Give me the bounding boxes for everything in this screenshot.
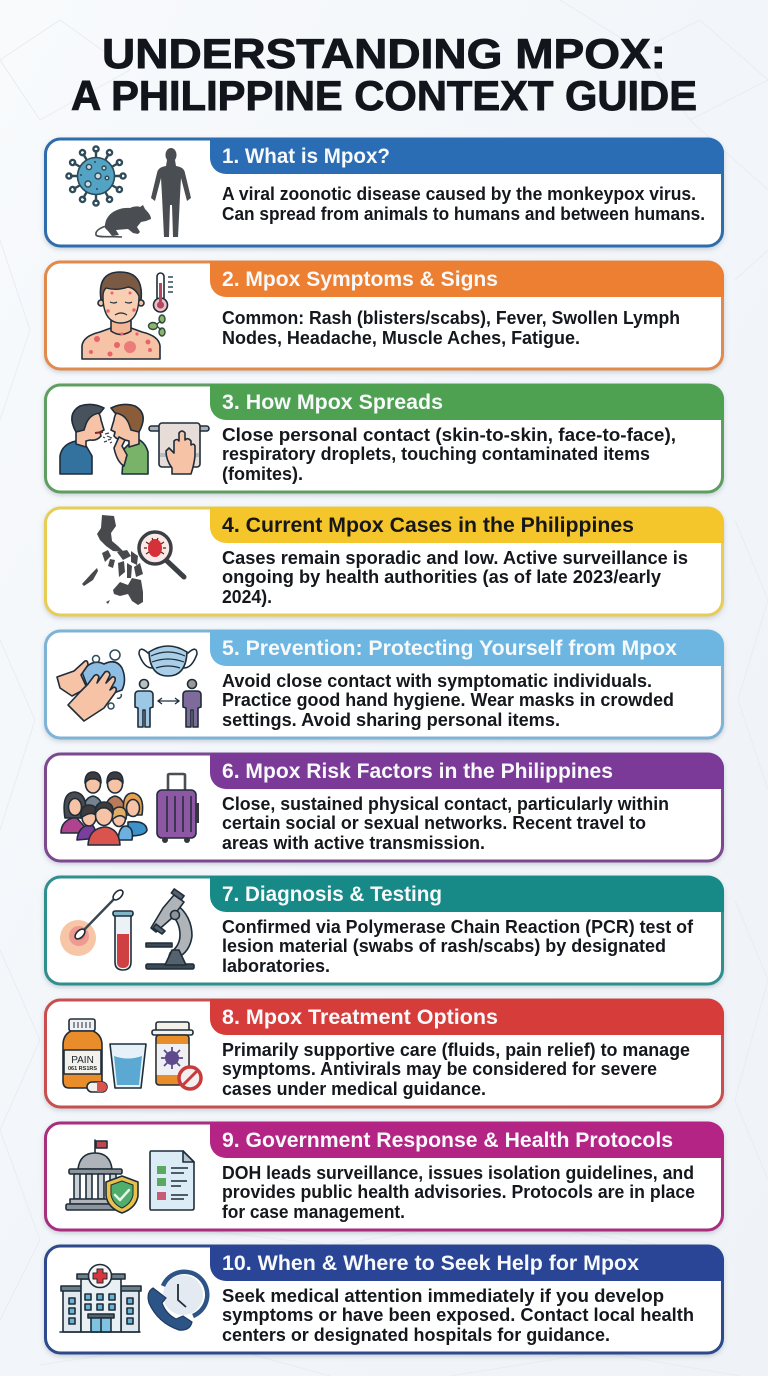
icon: antiviral bottle with prohibition sign — [152, 1022, 201, 1089]
title: UNDERSTANDING MPOX: — [102, 30, 666, 77]
body text: Confirmed via Polymerase Chain Reaction (PCR) test of — [222, 917, 694, 937]
icon: magnifier on virus — [139, 532, 184, 577]
body text: Close personal contact (skin-to-skin, face-to-face), — [222, 425, 676, 445]
icon: test tube — [113, 911, 133, 970]
body text — [222, 548, 688, 607]
heading: How Mpox Spreads: 3. How Mpox Spreads — [222, 391, 443, 414]
title: A PHILIPPINE CONTEXT GUIDE — [71, 72, 697, 119]
panel: 6 Risk factors — [46, 753, 724, 861]
panel: 4 Current cases — [46, 507, 724, 615]
icon: pain medicine bottle — [63, 1019, 107, 1092]
title — [71, 30, 697, 119]
body text: certain social or sexual networks. Recent travel to — [222, 813, 646, 833]
heading: Current Mpox Cases: 4. Current Mpox Cases in the Philippines — [222, 514, 634, 537]
heading: When & Where: 10. When & Where to Seek Help for Mpox — [222, 1252, 639, 1275]
icon: distance between people — [135, 680, 201, 727]
icon: towel and hand on contaminated item — [149, 423, 209, 474]
body text: 2024). — [222, 587, 272, 607]
icon: rat — [96, 205, 151, 237]
heading: Symptoms & Signs — [210, 261, 724, 297]
body text: symptoms. Antivirals may be considered for severe — [222, 1059, 657, 1079]
icon: pain medicine bottle: 061 RS1RS — [68, 1066, 97, 1072]
body text — [222, 1286, 694, 1345]
body text: cases under medical guidance. — [222, 1079, 486, 1099]
icon: virus — [66, 146, 126, 206]
body text: centers or designated hospitals for guidance. — [222, 1325, 610, 1345]
body text: provides public health advisories. Protocols are in place — [222, 1182, 695, 1202]
panel: 8 Treatment — [46, 999, 724, 1107]
body text: Cases remain sporadic and low. Active surveillance is — [222, 548, 688, 568]
body text: (fomites). — [222, 464, 303, 484]
body text — [222, 1040, 690, 1099]
heading: Treatment Options — [210, 999, 724, 1035]
body text: DOH leads surveillance, issues isolation guidelines, and — [222, 1163, 694, 1183]
heading: Diagnosis & Testing — [210, 876, 724, 912]
icon: human silhouette — [151, 148, 191, 237]
heading: Government Response — [210, 1122, 724, 1158]
heading: What is Mpox: 1. What is Mpox? — [222, 145, 390, 168]
body text: settings. Avoid sharing personal items. — [222, 710, 560, 730]
icon: hand washing — [57, 650, 124, 721]
body text: Primarily supportive care (fluids, pain relief) to manage — [222, 1040, 690, 1060]
panel: 10 When to seek help — [46, 1245, 724, 1353]
heading: Symptoms & Signs: 2. Mpox Symptoms & Signs — [222, 268, 498, 291]
icon: skin lesion and swab — [60, 888, 125, 956]
body text: Close, sustained physical contact, particularly within — [222, 794, 669, 814]
body text: ongoing by health authorities (as of late 2023/early — [222, 567, 661, 587]
heading: When & Where — [210, 1245, 724, 1281]
icon: thermometer — [154, 273, 173, 312]
icon: face mask — [139, 646, 197, 676]
heading: Prevention — [210, 630, 724, 666]
icon: hospital — [60, 1264, 141, 1332]
panel: 2 Symptoms — [46, 261, 724, 369]
body text: symptoms or have been exposed. Contact local health — [222, 1305, 694, 1325]
icon: pain medicine bottle: PAIN — [71, 1055, 94, 1066]
body text: Nodes, Headache, Muscle Aches, Fatigue. — [222, 328, 580, 348]
body text: areas with active transmission. — [222, 833, 485, 853]
icon: crowd of people — [61, 772, 147, 845]
body text — [222, 794, 669, 853]
body text: lesion material (swabs of rash/scabs) by designated — [222, 936, 666, 956]
heading: Treatment Options: 8. Mpox Treatment Options — [222, 1006, 498, 1029]
body text: Avoid close contact with symptomatic individuals. — [222, 671, 652, 691]
body text: Common: Rash (blisters/scabs), Fever, Swollen Lymph — [222, 308, 680, 328]
body text: Practice good hand hygiene. Wear masks in crowded — [222, 690, 674, 710]
icon: sick person with rash — [82, 272, 160, 359]
icon: swollen lymph nodes — [148, 315, 165, 336]
body text: laboratories. — [222, 956, 330, 976]
heading: Risk Factors: 6. Mpox Risk Factors in the Philippines — [222, 760, 613, 783]
icon: microscope — [146, 889, 194, 969]
heading: Current Mpox Cases — [210, 507, 724, 543]
heading: Diagnosis & Testing: 7. Diagnosis & Testing — [222, 883, 442, 906]
body text — [222, 917, 694, 976]
body text: for case management. — [222, 1202, 405, 1222]
panel: 1 What is Mpox — [46, 138, 724, 246]
icon: checklist document — [150, 1151, 194, 1210]
panel: 3 How Mpox Spreads — [46, 384, 724, 492]
icon: phone and clock — [148, 1272, 207, 1330]
icon: government building and shield — [66, 1140, 138, 1213]
body text: Can spread from animals to humans and between humans. — [222, 204, 705, 224]
heading: Prevention: 5. Prevention: Protecting Yourself from Mpox — [222, 637, 677, 660]
heading: What is Mpox — [210, 138, 724, 174]
icon: glass of water — [110, 1044, 146, 1088]
icon: suitcase — [157, 774, 199, 843]
body text — [222, 425, 676, 484]
body text — [222, 1163, 695, 1222]
icon: Philippines map — [82, 515, 143, 605]
heading: How Mpox Spreads — [210, 384, 724, 420]
body text: A viral zoonotic disease caused by the monkeypox virus. — [222, 184, 696, 204]
heading: Government Response: 9. Government Response & Health Protocols — [222, 1129, 673, 1152]
body text — [222, 308, 680, 348]
body text: Seek medical attention immediately if you develop — [222, 1286, 664, 1306]
heading: Risk Factors — [210, 753, 724, 789]
panel: 5 Prevention — [46, 630, 724, 738]
body text — [222, 671, 674, 730]
panel: 7 Diagnosis — [46, 876, 724, 984]
body text: respiratory droplets, touching contaminated items — [222, 444, 650, 464]
panel: 9 Government response — [46, 1122, 724, 1230]
body text — [222, 184, 705, 224]
icon: two people and droplets — [60, 404, 148, 474]
